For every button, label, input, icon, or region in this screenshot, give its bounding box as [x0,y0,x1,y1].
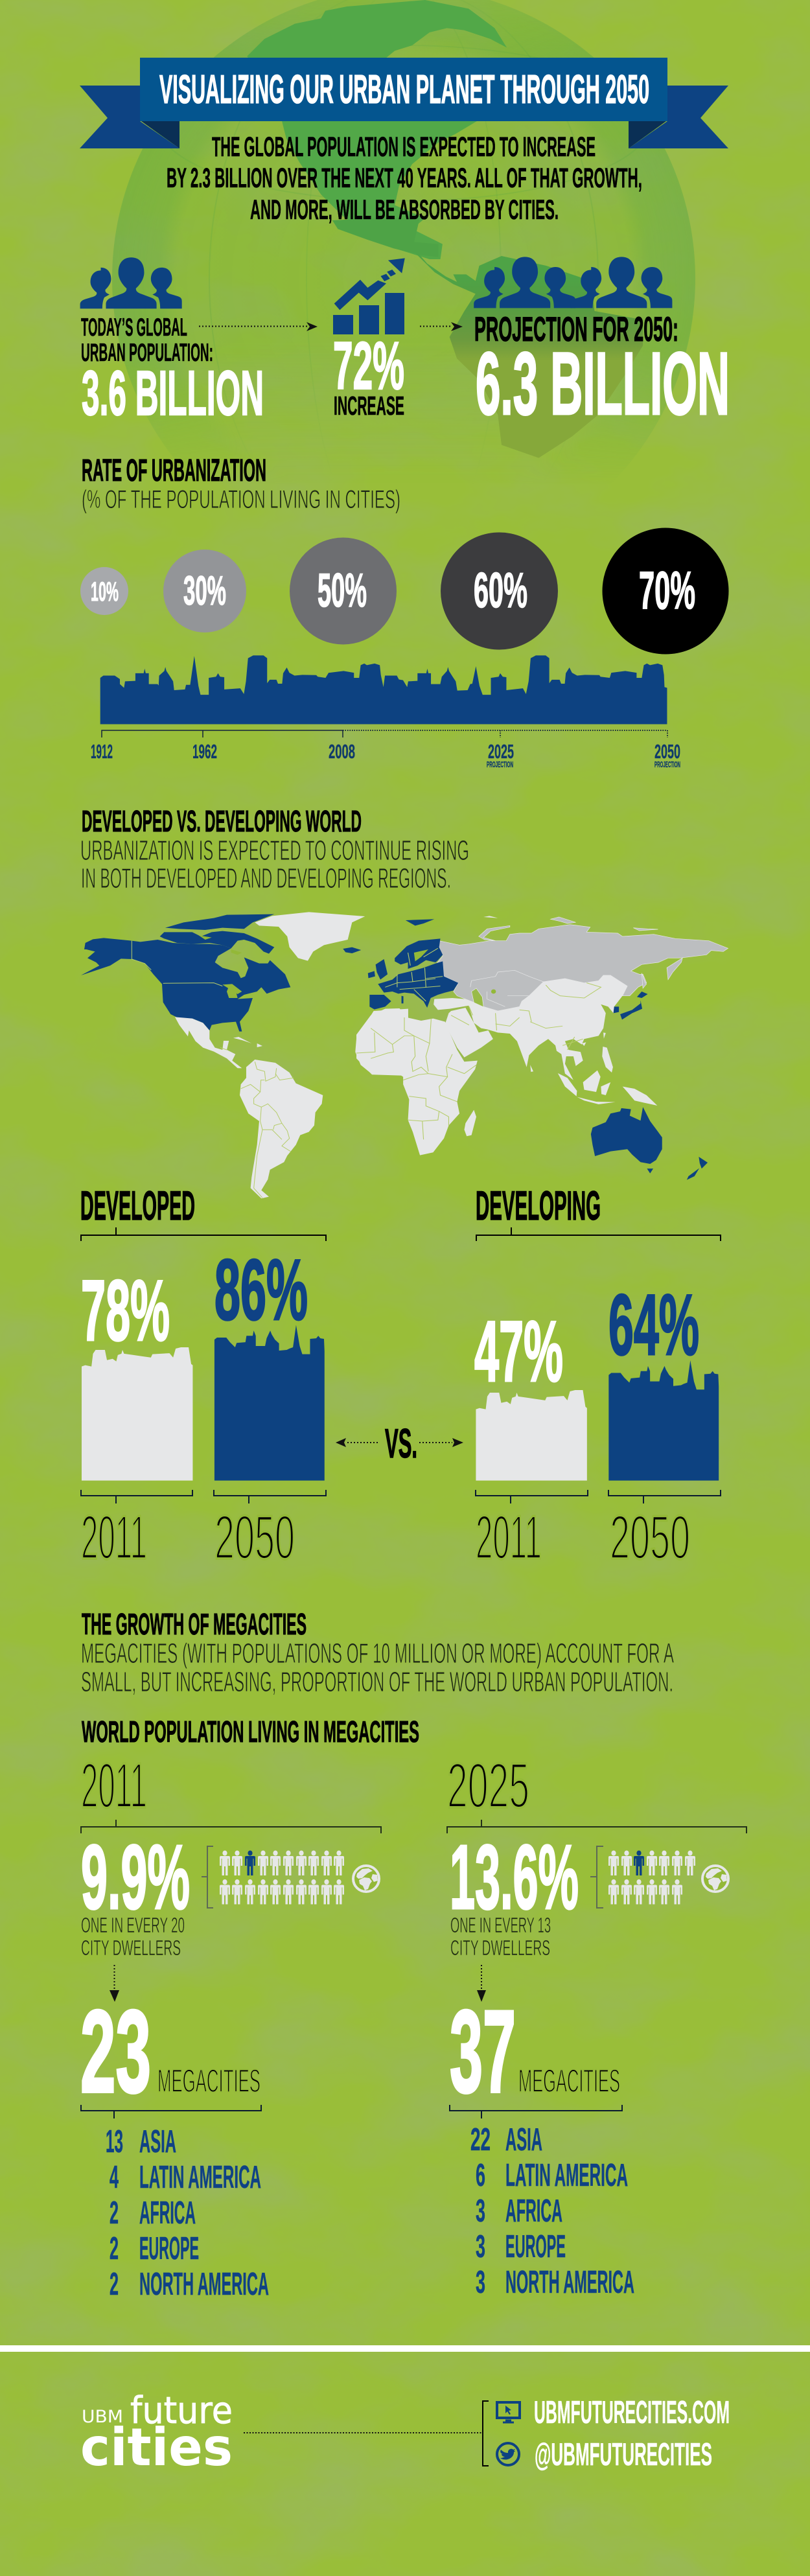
panel: 2011 megacities: CITY DWELLERS [81,1936,181,1960]
panel: developed: 2011 [81,1503,147,1572]
section: rate of urbanization: RATE OF URBANIZATION [82,454,266,488]
logo: UBM [82,2407,123,2427]
panel: 2025 megacities: NORTH AMERICA [505,2265,634,2300]
bars [476,1360,719,1481]
panel: 2011 megacities: MEGACITIES [157,2063,260,2099]
section: rate of urbanization: PROJECTION [654,760,680,769]
section heading: developed vs developing: IN BOTH DEVELOPED AND DEVELOPING REGIONS. [81,863,451,894]
list: regions 2025: ASIA [505,2122,542,2157]
timeline [91,730,680,769]
arrow down [477,1965,486,2002]
section heading: megacities [81,1607,674,1748]
panel: developing [474,1183,721,1572]
circles: 10% [91,576,119,607]
panel: 2025 megacities: ONE IN EVERY 13 [450,1913,551,1937]
panel: 2025 megacities [447,1750,746,2300]
panel: 2025 megacities: CITY DWELLERS [450,1936,550,1960]
circles [80,528,728,655]
skyline [100,655,667,724]
list: regions 2011: 13 [106,2124,123,2159]
stat: 72% increase [333,329,404,421]
icon: twitter [497,2443,519,2465]
panel: 2011 megacities: 2011 [81,1750,147,1821]
vs arrows: VS. [385,1421,417,1467]
panel: 2011 megacities: 9.9% [81,1826,190,1928]
timeline: 2008 [329,740,355,763]
stat: today's population: TODAY’S GLOBAL [81,314,187,342]
list: regions 2011: LATIN AMERICA [139,2160,261,2195]
timeline: PROJECTION [487,760,513,769]
list: regions 2025 [470,2122,634,2300]
section heading: developed vs developing: URBANIZATION IS EXPECTED TO CONTINUE RISING [80,835,469,866]
map: americas [81,912,408,1198]
section heading: megacities: WORLD POPULATION LIVING IN MEGACITIES [82,1715,419,1748]
vs arrows [336,1421,463,1467]
timeline: 2025 [488,740,514,763]
list: regions 2025: 6 [476,2158,485,2193]
section: rate of urbanization: (% OF THE POPULATION LIVING IN CITIES) [82,485,400,514]
arrow: today to increase [199,322,318,331]
section heading: megacities: THE GROWTH OF MEGACITIES [82,1607,307,1641]
circles: 70% [639,561,695,620]
world map [81,912,728,1198]
map: europe, africa, asia, oceania [356,916,728,1180]
list: regions 2025: 3 [476,2229,485,2264]
panel: 2025 megacities: 2025 [447,1750,529,1821]
panel: developed [80,1183,326,1572]
list: regions 2025: 3 [476,2265,485,2300]
section heading: developed vs developing: DEVELOPED VS. DEVELOPING WORLD [82,804,362,838]
pictogram: one in thirteen [608,1851,695,1904]
icon: globe [353,1866,379,1892]
panel: developing: 2011 [476,1503,542,1572]
panel: developing: 64% [608,1277,699,1373]
list: regions 2025: EUROPE [505,2229,566,2264]
list: regions 2025: LATIN AMERICA [505,2158,628,2193]
bars [82,1325,325,1481]
panel: developed: 86% [214,1242,308,1338]
logo [80,2389,233,2477]
panel: 2011 megacities: ONE IN EVERY 20 [81,1913,185,1937]
panel: 2025 megacities: 37 [450,1986,516,2117]
timeline: 2050 [654,740,680,763]
list: regions 2025: AFRICA [505,2194,562,2229]
timeline: 1962 [192,740,217,763]
circles: 60% [474,563,527,618]
intro text [167,132,642,226]
icon: monitor [497,2402,520,2422]
list: regions 2011: 4 [110,2160,119,2195]
section heading: developed vs developing [80,804,469,894]
stat: 72% increase: INCREASE [334,391,404,421]
arrow down [110,1965,119,2002]
icon: growth chart [333,258,405,334]
logo: future [130,2389,233,2432]
icon: globe [702,1866,728,1892]
list: regions 2011 [106,2124,269,2302]
stat: today's population [80,257,264,428]
circles: 30% [183,568,226,614]
connector [244,2401,489,2466]
panel: 2025 megacities: MEGACITIES [518,2063,620,2099]
stat: today's population: URBAN POPULATION: [81,339,213,367]
pictogram: one in twenty [220,1851,344,1904]
panel: 2025 megacities: 13.6% [450,1826,579,1928]
panel: developed: DEVELOPED [80,1183,195,1229]
stat: 72% increase: 72% [333,329,404,404]
list: regions 2011: EUROPE [139,2231,199,2266]
list: regions 2011: ASIA [139,2124,176,2159]
panel: developed: 78% [81,1263,170,1359]
stat: today's population: 3.6 BILLION [82,358,264,428]
footer divider [0,2345,810,2352]
panel: 2011 megacities: NORTH AMERICA [139,2267,269,2302]
panel: developing: DEVELOPING [476,1183,601,1229]
arrow: increase to projection [420,322,463,331]
list: regions 2011: 2 [110,2267,119,2302]
list: regions 2011: 2 [110,2196,119,2231]
icon: six people [474,257,672,308]
timeline: 1912 [91,740,113,763]
title banner [80,58,728,148]
panel: 2011 megacities: 23 [80,1986,151,2117]
list: regions 2025: 22 [470,2122,491,2157]
stat: projection 2050 [474,257,730,434]
globe background [112,0,695,458]
logo: cities [80,2417,233,2477]
panel: developed: 2050 [214,1503,295,1572]
list: regions 2011: AFRICA [139,2196,196,2231]
panel: 2011 megacities [80,1750,381,2302]
list: regions 2025: 3 [476,2194,485,2229]
icon: three people [80,257,182,308]
circles: 50% [318,564,367,617]
panel: developing: 2050 [610,1503,690,1572]
panel: developing: 47% [474,1304,563,1400]
section: rate of urbanization [80,454,728,769]
list: regions 2011: 2 [110,2231,119,2266]
